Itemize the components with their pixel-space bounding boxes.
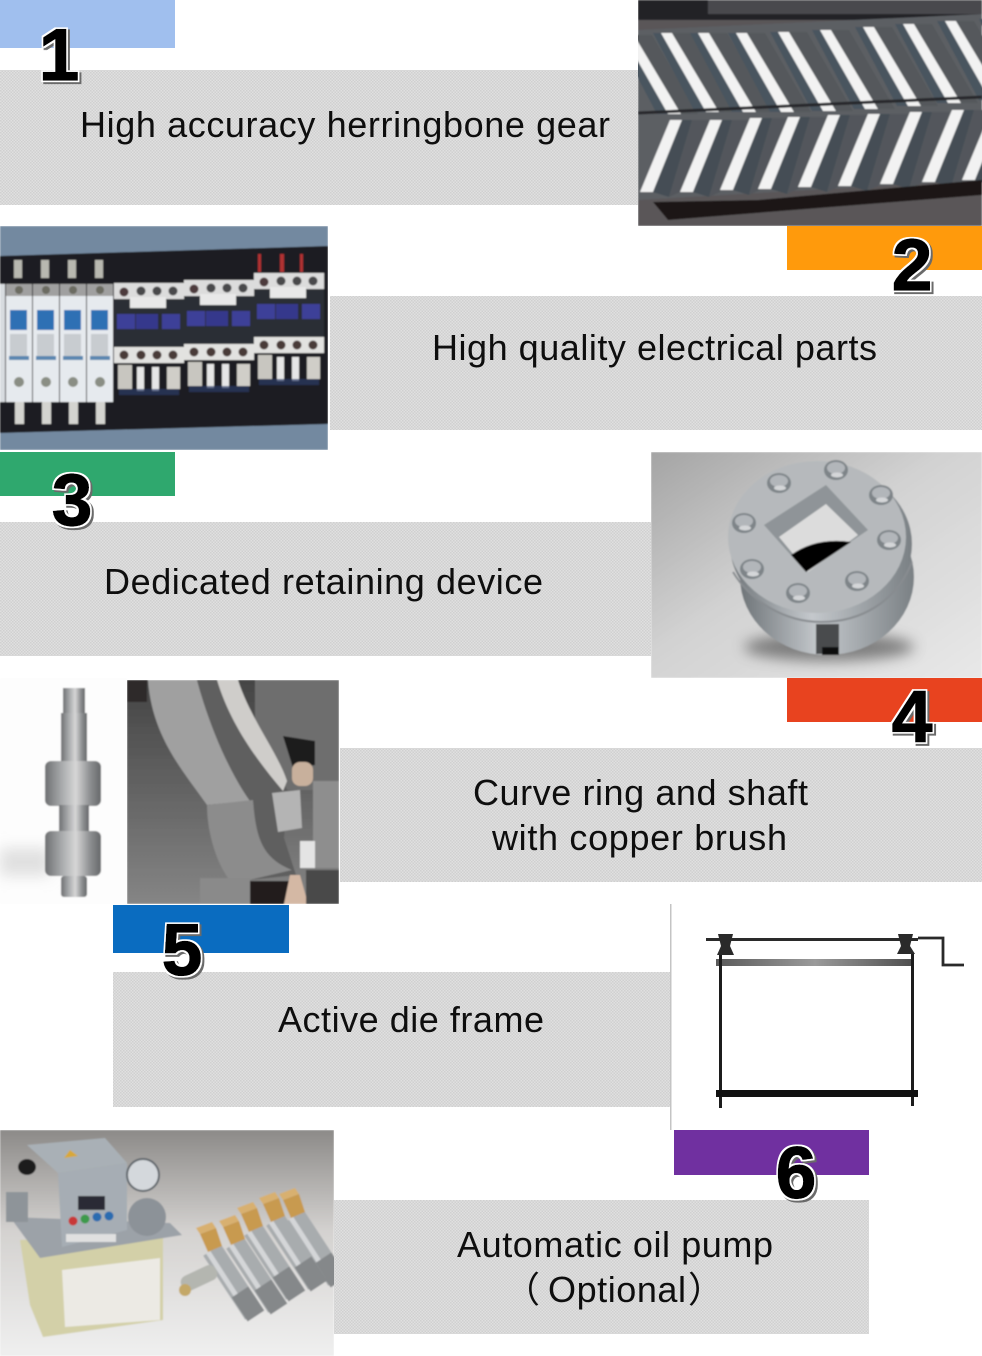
label 4: with copper brush <box>491 817 787 858</box>
photo: herringbone gear <box>638 0 982 226</box>
band 5 <box>113 972 671 1107</box>
number 1: 1 <box>39 15 79 96</box>
panel 2: electrical parts <box>0 225 982 450</box>
band 2 <box>330 296 982 430</box>
band 4 <box>340 748 982 882</box>
colour tab 5 <box>113 905 289 953</box>
number 5: 5 <box>162 910 202 991</box>
label 6: Automatic oil pump <box>457 1224 773 1265</box>
panel 1: herringbone gear <box>0 0 982 226</box>
photo: oil pump <box>0 1130 334 1356</box>
colour tab 3 <box>0 452 175 496</box>
label 6: ） <box>688 1269 724 1310</box>
photo: shaft <box>0 687 102 898</box>
panel 5: active die frame <box>113 904 982 1130</box>
colour tab 2 <box>787 226 982 270</box>
label 4 <box>473 772 808 858</box>
number 4: 4 <box>892 677 933 758</box>
colour tab 4 <box>787 678 982 722</box>
band 3 <box>0 522 651 656</box>
label 6: Optional <box>548 1269 686 1310</box>
band 6 <box>334 1200 869 1334</box>
label 6 <box>457 1224 773 1310</box>
label 2: High quality electrical parts <box>432 327 877 368</box>
photo: curve ring <box>127 680 339 904</box>
band 1 <box>0 70 638 205</box>
panel 4: curve ring and shaft <box>0 677 982 904</box>
number 2: 2 <box>892 225 932 306</box>
label 3: Dedicated retaining device <box>104 561 543 602</box>
number 3: 3 <box>52 460 92 541</box>
panel 3: retaining device <box>0 452 982 678</box>
colour tab 6 <box>674 1130 869 1175</box>
label 5: Active die frame <box>278 999 544 1040</box>
photo: retaining device <box>651 452 982 678</box>
number 6: 6 <box>776 1133 816 1214</box>
photo: electrical parts <box>0 226 328 450</box>
colour tab 1 <box>0 0 175 48</box>
label 4: Curve ring and shaft <box>473 772 808 813</box>
photo: die frame <box>670 904 982 1130</box>
label 6: （ <box>504 1269 540 1310</box>
panel 6: automatic oil pump <box>0 1130 869 1356</box>
label 1: High accuracy herringbone gear <box>80 104 610 145</box>
